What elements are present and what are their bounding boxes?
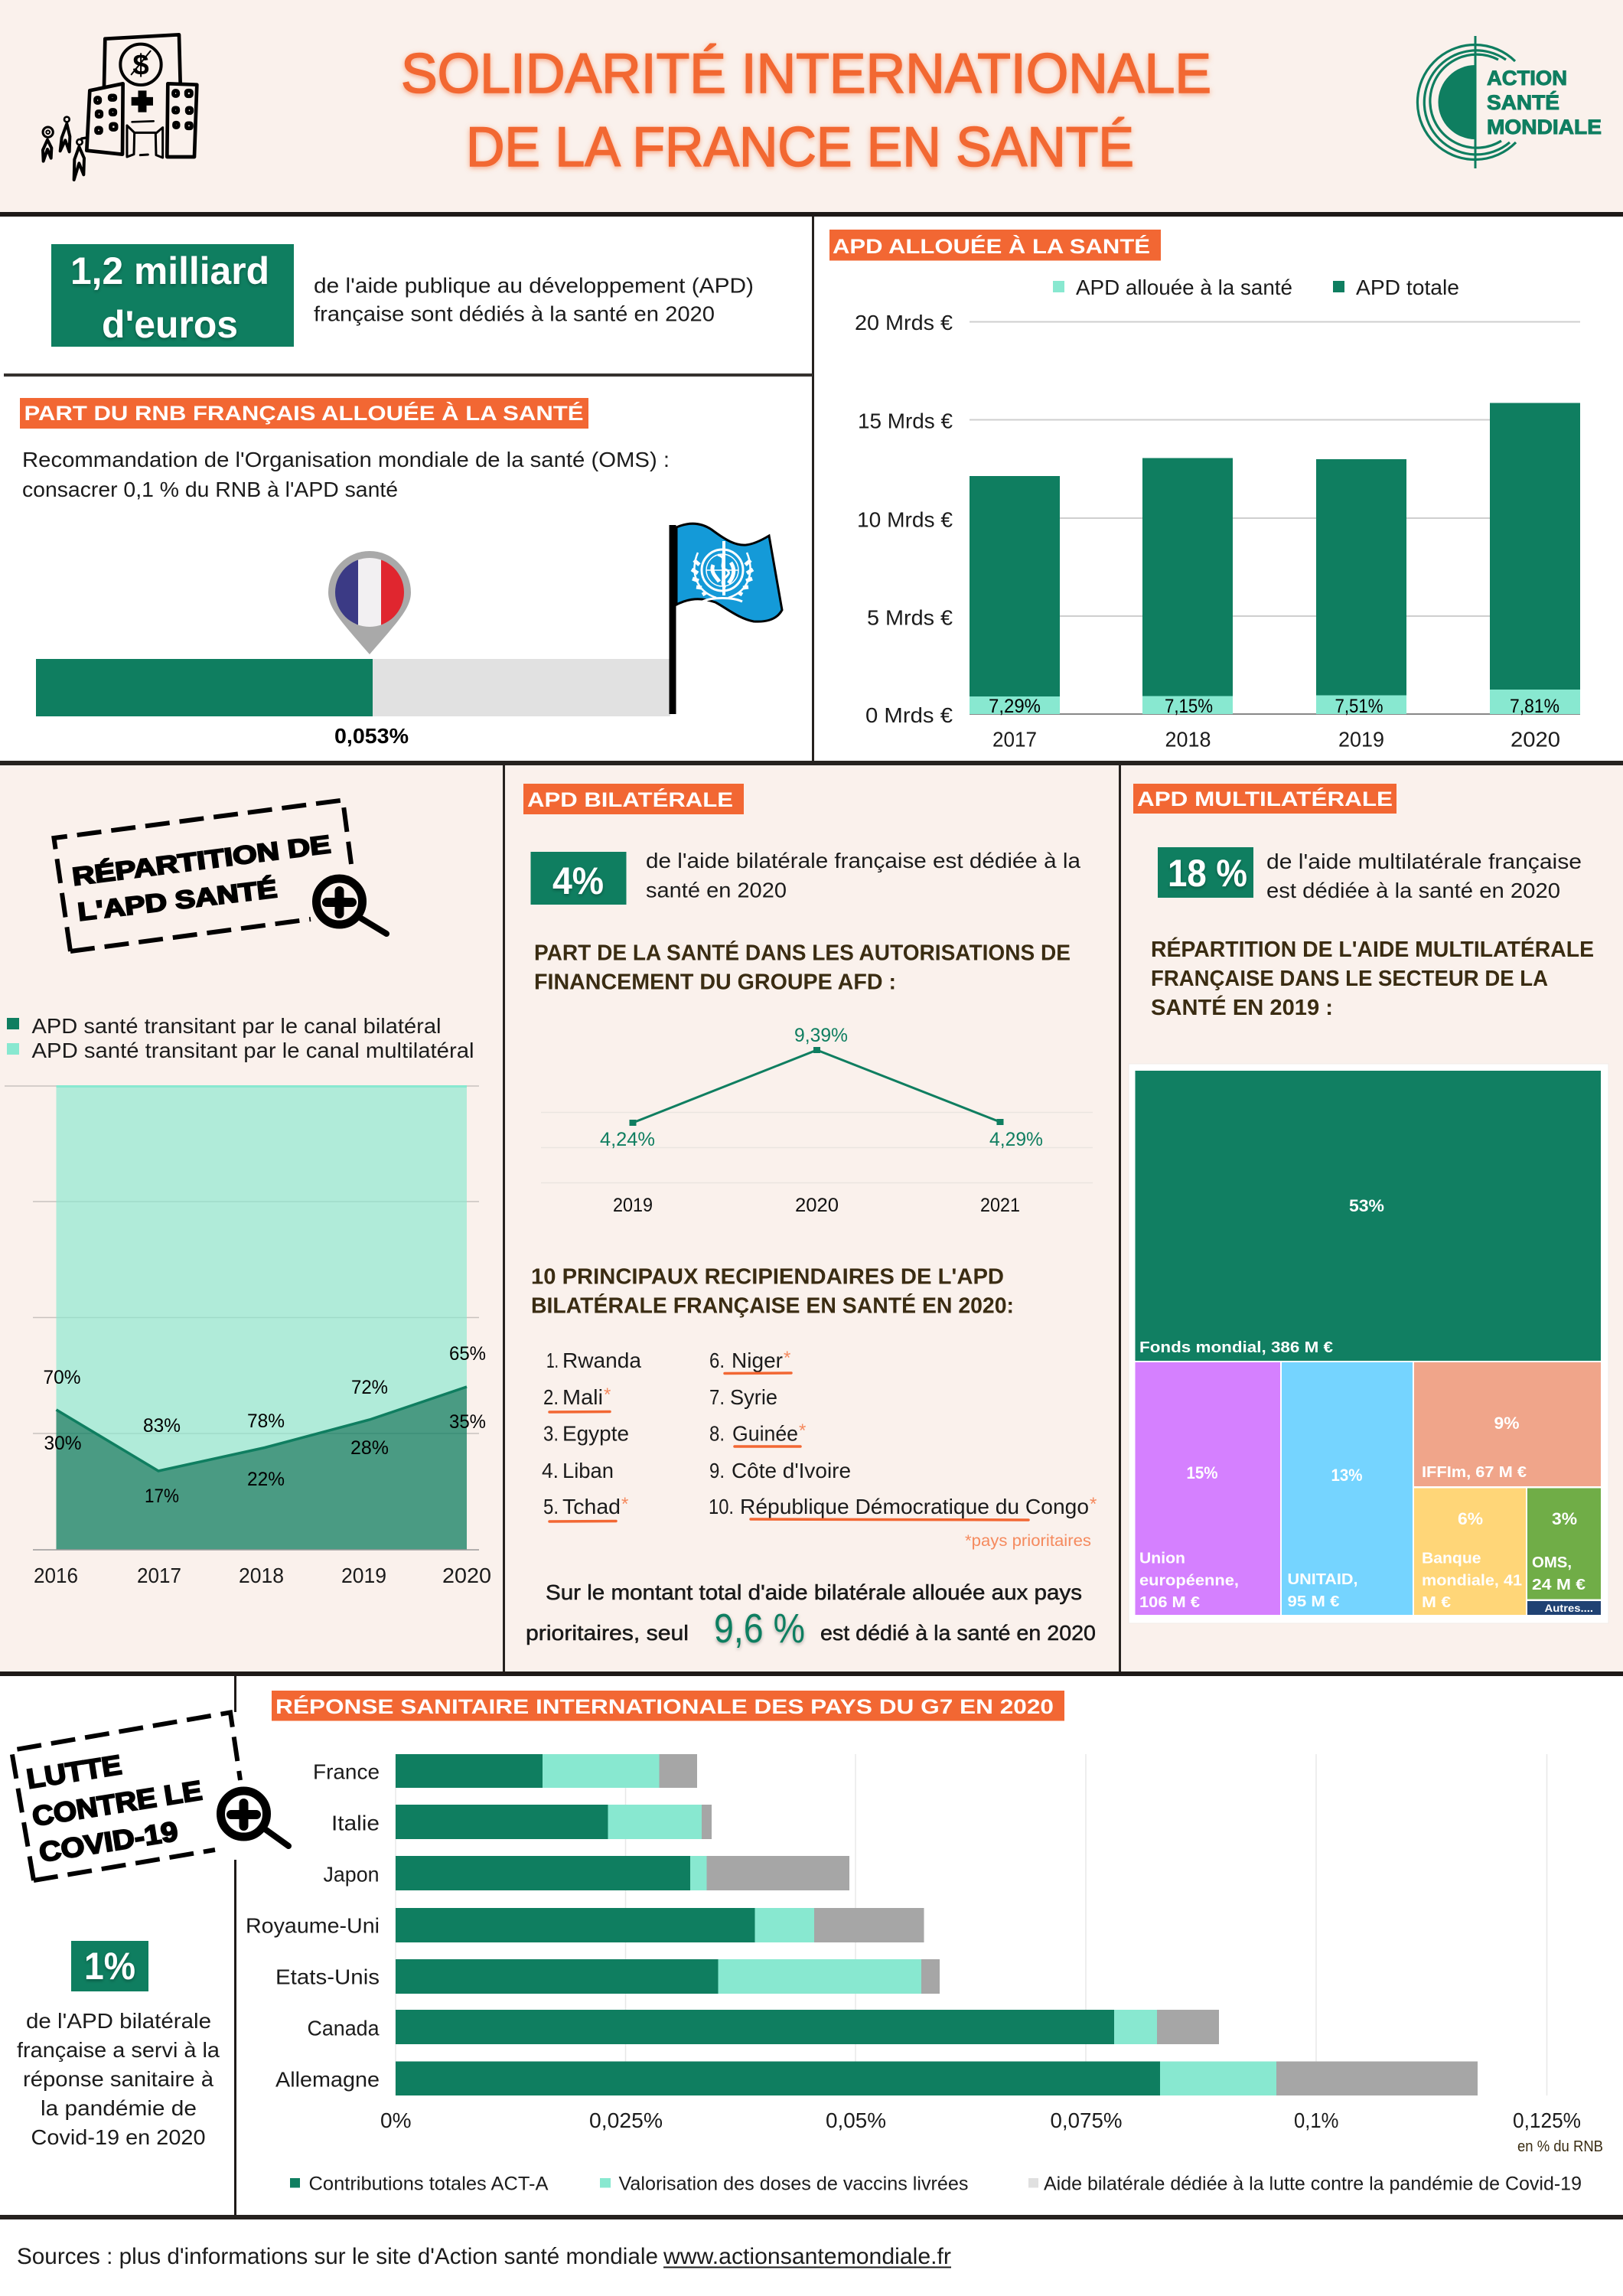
title: DE LA FRANCE EN SANTÉ xyxy=(466,116,1134,178)
stat description: française a servi à la xyxy=(17,2038,220,2062)
area chart: 70% xyxy=(43,1367,81,1388)
axis labels xyxy=(380,2108,1603,2155)
row: Etats-Unis: Etats-Unis xyxy=(275,1965,380,1988)
subheading: AFD: PART DE LA SANTÉ DANS LES AUTORISATIONS DE xyxy=(534,940,1071,966)
icon: France map pin xyxy=(328,551,411,654)
area chart: 17% xyxy=(145,1486,179,1507)
subheading: FRANÇAISE DANS LE SECTEUR DE LA xyxy=(1151,967,1548,991)
legend xyxy=(1053,276,1459,299)
tile: UNITAID xyxy=(1282,1362,1413,1615)
recipients list: * xyxy=(784,1348,790,1368)
bar 2019: 7,51% xyxy=(1335,696,1383,717)
recipients list: Côte d'Ivoire xyxy=(732,1459,851,1482)
axis labels: 0% xyxy=(380,2108,412,2132)
recipients list: Syrie xyxy=(730,1385,777,1409)
stat description: santé en 2020 xyxy=(646,879,787,902)
legend xyxy=(290,2174,1582,2195)
logo: Action Santé Mondiale: ACTION xyxy=(1487,67,1567,90)
row: Royaume-Uni: Royaume-Uni xyxy=(246,1913,380,1938)
footnote: priority countries: *pays prioritaires xyxy=(965,1532,1091,1550)
treemap xyxy=(1129,1064,1608,1623)
tile: Autres xyxy=(1527,1601,1601,1615)
stamp heading: COVID-19 xyxy=(37,1815,180,1868)
stamp heading xyxy=(11,1713,240,1880)
subheading: SANTÉ EN 2019 : xyxy=(1151,994,1333,1020)
tile: Union européenne: 106 M € xyxy=(1139,1594,1200,1611)
panel: APD allouée à la santé xyxy=(829,230,1580,752)
stat box 4%: 4% xyxy=(552,859,604,902)
bar value: 0,053% xyxy=(334,724,409,748)
bar 2019: 2019 xyxy=(1338,727,1384,752)
row: Italie xyxy=(331,1805,712,1839)
area chart: 2017 xyxy=(137,1564,181,1587)
recipients list: 3. xyxy=(543,1422,559,1445)
callout: 9,6 % xyxy=(526,1580,1096,1652)
title: SOLIDARITÉ INTERNATIONALE xyxy=(401,43,1211,105)
callout: 9,6 %: est dédié à la santé en 2020 xyxy=(820,1621,1096,1645)
tile: OMS: 24 M € xyxy=(1532,1577,1586,1593)
stat box xyxy=(51,244,294,347)
logo: Action Santé Mondiale: MONDIALE xyxy=(1487,116,1602,139)
stat box 18%: 18 % xyxy=(1168,852,1247,895)
axis labels: 0,075% xyxy=(1050,2108,1122,2132)
row: Canada: Canada xyxy=(308,2016,380,2040)
heading: PART DU RNB FRANÇAIS ALLOUÉE À LA SANTÉ xyxy=(24,401,583,425)
stamp heading: LUTTE xyxy=(24,1749,124,1795)
panel: APD multilatérale xyxy=(1129,784,1608,1623)
recommendation text: consacrer 0,1 % du RNB à l'APD santé xyxy=(22,478,398,501)
row: Allemagne: Allemagne xyxy=(275,2068,380,2091)
tile: IFFIm: 9% xyxy=(1494,1414,1520,1433)
row: Japon: Japon xyxy=(323,1863,380,1886)
subheading: recipients: BILATÉRALE FRANÇAISE EN SANTÉ EN 2020: xyxy=(531,1292,1014,1318)
recipients list: 9. xyxy=(709,1459,725,1482)
legend: APD santé transitant par le canal bilatéral xyxy=(32,1014,441,1038)
recipients list: Niger xyxy=(732,1349,783,1372)
sources footer: Sources : plus d'informations sur le site d'Action santé mondiale xyxy=(17,2244,658,2269)
subheading: recipients: 10 PRINCIPAUX RECIPIENDAIRES DE L'APD xyxy=(531,1264,1004,1289)
stat box: 1,2 milliard xyxy=(70,249,269,292)
tile: Autres: Autres.... xyxy=(1544,1602,1593,1614)
area chart: 2018 xyxy=(239,1564,284,1587)
stat description: Covid-19 en 2020 xyxy=(31,2125,205,2149)
stat box 1% xyxy=(71,1941,148,1991)
legend: APD santé transitant par le canal multilatéral xyxy=(32,1039,474,1062)
area chart: 35% xyxy=(449,1411,486,1433)
recipients list: Egypte xyxy=(562,1422,629,1445)
recipients list: * xyxy=(799,1420,806,1441)
sources footer xyxy=(17,2244,951,2269)
recipients list: 6. xyxy=(709,1349,725,1372)
recipients list: 5. xyxy=(543,1495,559,1518)
tile: Banque mondiale xyxy=(1414,1488,1526,1615)
bar 2020: 7,81% xyxy=(1510,696,1559,717)
stat description: de l'aide multilatérale française xyxy=(1266,850,1582,873)
row: Canada xyxy=(308,2010,1219,2044)
legend: Valorisation des doses de vaccins livrées xyxy=(618,2174,969,2195)
panel: réponse sanitaire G7 xyxy=(246,1691,1603,2195)
recipients list: Guinée xyxy=(732,1422,798,1445)
row: Japon xyxy=(323,1856,849,1890)
line chart: 2019 xyxy=(613,1195,653,1216)
panel: part du RNB xyxy=(20,398,782,748)
recipients list: Rwanda xyxy=(562,1349,641,1372)
tile: Banque mondiale: mondiale, 41 xyxy=(1422,1572,1522,1589)
row: France xyxy=(313,1754,697,1788)
area chart: 65% xyxy=(449,1343,486,1365)
panel: lutte contre le Covid-19 xyxy=(11,1713,288,2149)
stat description: française sont dédiés à la santé en 2020 xyxy=(314,302,715,326)
stat description: de l'APD bilatérale xyxy=(26,2009,211,2033)
heading: RÉPONSE SANITAIRE INTERNATIONALE DES PAYS DU G7 EN 2020 xyxy=(275,1694,1054,1718)
stat description xyxy=(646,849,1080,902)
stamp heading: RÉPARTITION DE xyxy=(70,830,332,891)
tile: Banque mondiale: 6% xyxy=(1458,1509,1483,1528)
heading: APD MULTILATÉRALE xyxy=(1137,787,1393,810)
heading xyxy=(272,1691,1064,1720)
area chart: 83% xyxy=(143,1415,181,1437)
subheading xyxy=(1151,936,1594,1020)
tile: IFFIm xyxy=(1414,1362,1601,1486)
subheading: AFD: FINANCEMENT DU GROUPE AFD : xyxy=(534,970,896,995)
recipients list xyxy=(542,1348,1097,1521)
stat description xyxy=(1266,850,1582,902)
progress bar xyxy=(36,659,670,716)
recipients list: Mali xyxy=(562,1385,603,1409)
legend: APD totale xyxy=(1356,276,1459,299)
stat description: de l'aide bilatérale française est dédiée à la xyxy=(646,849,1080,872)
stat description: réponse sanitaire à xyxy=(23,2067,213,2091)
panel: 1,2 milliard d'euros xyxy=(51,244,754,347)
recipients list: * xyxy=(1090,1494,1097,1515)
area chart: 28% xyxy=(350,1437,389,1459)
heading: APD ALLOUÉE À LA SANTÉ xyxy=(833,234,1150,258)
row: Royaume-Uni xyxy=(246,1908,924,1942)
tile: OMS xyxy=(1527,1488,1601,1600)
stat description: est dédiée à la santé en 2020 xyxy=(1266,879,1560,902)
tile: UNITAID: 13% xyxy=(1331,1466,1362,1485)
callout: 9,6 %: 9,6 % xyxy=(714,1606,805,1652)
logo: Action Santé Mondiale xyxy=(1417,36,1602,168)
tile: Union européenne xyxy=(1136,1362,1280,1615)
stacked bar chart: 20 Mrds € xyxy=(855,311,953,334)
area chart: 2020 xyxy=(442,1564,491,1587)
legend: Aide bilatérale dédiée à la lutte contre la pandémie de Covid-19 xyxy=(1044,2174,1582,2195)
stat description: de l'aide publique au développement (APD) xyxy=(314,274,754,297)
recipients list: * xyxy=(604,1384,611,1405)
row: France: France xyxy=(313,1760,380,1783)
stat description: la pandémie de xyxy=(41,2096,197,2120)
stacked bar chart: 0 Mrds € xyxy=(865,703,953,727)
stacked bar chart xyxy=(855,311,1580,752)
callout: 9,6 %: prioritaires, seul xyxy=(526,1621,689,1645)
axis labels: 0,05% xyxy=(826,2108,886,2132)
recipients list: 10. xyxy=(709,1495,734,1518)
subheading: RÉPARTITION DE L'AIDE MULTILATÉRALE xyxy=(1151,936,1594,962)
heading xyxy=(523,784,744,814)
tile: UNITAID: UNITAID, xyxy=(1287,1571,1357,1588)
bar 2018: 2018 xyxy=(1165,727,1211,752)
stat description xyxy=(17,2009,220,2149)
line chart: 4,29% xyxy=(989,1129,1043,1150)
recipients list: 7. xyxy=(709,1385,725,1409)
stacked bar chart: 10 Mrds € xyxy=(857,508,953,531)
recipients list: Tchad xyxy=(562,1495,621,1518)
bar 2020 xyxy=(1490,403,1580,752)
icon: magnifier xyxy=(220,1791,288,1846)
bar 2019 xyxy=(1316,459,1406,752)
bar 2017: 7,29% xyxy=(989,696,1041,717)
stat box 4% xyxy=(531,852,626,905)
recommendation text xyxy=(22,448,670,501)
area chart: 22% xyxy=(247,1469,285,1490)
bar 2018: 7,15% xyxy=(1165,696,1213,717)
legend: Contributions totales ACT-A xyxy=(309,2174,549,2195)
stat box 1%: 1% xyxy=(84,1945,135,1988)
tile: Fonds mondial: 53% xyxy=(1349,1196,1384,1215)
tile: UNITAID: 95 M € xyxy=(1287,1593,1339,1610)
bar 2018 xyxy=(1142,458,1233,752)
line chart xyxy=(541,1025,1093,1216)
area chart: 72% xyxy=(351,1377,388,1398)
tile: Fonds mondial xyxy=(1136,1071,1601,1361)
bar 2017: 2017 xyxy=(992,727,1037,752)
recipients list: Liban xyxy=(562,1459,614,1482)
recommendation text: Recommandation de l'Organisation mondiale de la santé (OMS) : xyxy=(22,448,670,471)
axis labels: en % du RNB xyxy=(1517,2138,1603,2155)
recipients list: 1. xyxy=(546,1349,559,1372)
panel: répartition de l'APD santé xyxy=(5,801,491,1587)
stamp heading: CONTRE LE xyxy=(30,1774,204,1832)
bar 2020: 2020 xyxy=(1511,727,1560,752)
legend xyxy=(7,1014,474,1062)
tile: OMS: 3% xyxy=(1552,1509,1577,1528)
heading xyxy=(20,398,588,429)
heading xyxy=(829,230,1161,260)
line chart: 9,39% xyxy=(794,1025,848,1046)
stacked bar chart: 15 Mrds € xyxy=(858,409,953,433)
recipients list: * xyxy=(621,1494,628,1515)
line chart: 2021 xyxy=(980,1195,1020,1216)
recipients list: République Démocratique du Congo xyxy=(740,1495,1089,1518)
tile: IFFIm: IFFIm, 67 M € xyxy=(1422,1464,1527,1481)
stacked bar chart: 5 Mrds € xyxy=(867,606,953,629)
stat description xyxy=(314,274,754,326)
panel: APD bilatérale xyxy=(523,784,1097,1652)
row: Allemagne xyxy=(275,2062,1478,2095)
recipients list: 4. xyxy=(542,1459,559,1482)
area chart: 2016 xyxy=(34,1564,78,1587)
line chart: 4,24% xyxy=(600,1129,655,1150)
title xyxy=(401,43,1211,178)
icon: WHO flag xyxy=(673,523,782,714)
area chart: 78% xyxy=(247,1411,285,1432)
tile: Banque mondiale: M € xyxy=(1422,1594,1451,1611)
subheading: recipients xyxy=(531,1264,1014,1318)
tile: Fonds mondial: Fonds mondial, 386 M € xyxy=(1139,1339,1333,1356)
legend: APD allouée à la santé xyxy=(1076,276,1292,299)
logo: Action Santé Mondiale: SANTÉ xyxy=(1487,90,1559,114)
sources footer: www.actionsantemondiale.fr xyxy=(663,2244,951,2269)
icon: hospital with patients xyxy=(43,34,197,180)
line chart: 2020 xyxy=(795,1195,839,1216)
heading xyxy=(1133,784,1396,814)
row: Italie: Italie xyxy=(331,1811,380,1835)
callout: 9,6 %: Sur le montant total d'aide bilatérale allouée aux pays xyxy=(546,1580,1082,1604)
icon: magnifier xyxy=(317,879,386,934)
icon: hospital with patients: $ xyxy=(132,48,149,81)
stat box: d'euros xyxy=(102,303,238,346)
area chart: 30% xyxy=(44,1433,81,1454)
axis labels: 0,1% xyxy=(1294,2108,1339,2132)
tile: Union européenne: 15% xyxy=(1186,1463,1218,1482)
stamp heading xyxy=(54,801,351,951)
row: Etats-Unis xyxy=(275,1959,940,1994)
axis labels: 0,125% xyxy=(1513,2108,1581,2132)
tile: OMS: OMS, xyxy=(1532,1554,1572,1571)
stamp heading: L'APD SANTÉ xyxy=(76,874,279,926)
tile: Banque mondiale: Banque xyxy=(1422,1551,1481,1567)
recipients list: 2. xyxy=(543,1385,559,1409)
bar 2017 xyxy=(970,476,1060,752)
recipients list: 8. xyxy=(709,1422,725,1445)
tile: Union européenne: Union xyxy=(1139,1551,1185,1567)
tile: Union européenne: européenne, xyxy=(1139,1572,1239,1589)
stacked horizontal bar chart xyxy=(246,1754,1603,2155)
subheading: AFD xyxy=(534,940,1071,995)
heading: APD BILATÉRALE xyxy=(527,788,733,811)
axis labels: 0,025% xyxy=(589,2108,663,2132)
area chart: 2019 xyxy=(341,1564,386,1587)
area chart xyxy=(5,1086,491,1587)
